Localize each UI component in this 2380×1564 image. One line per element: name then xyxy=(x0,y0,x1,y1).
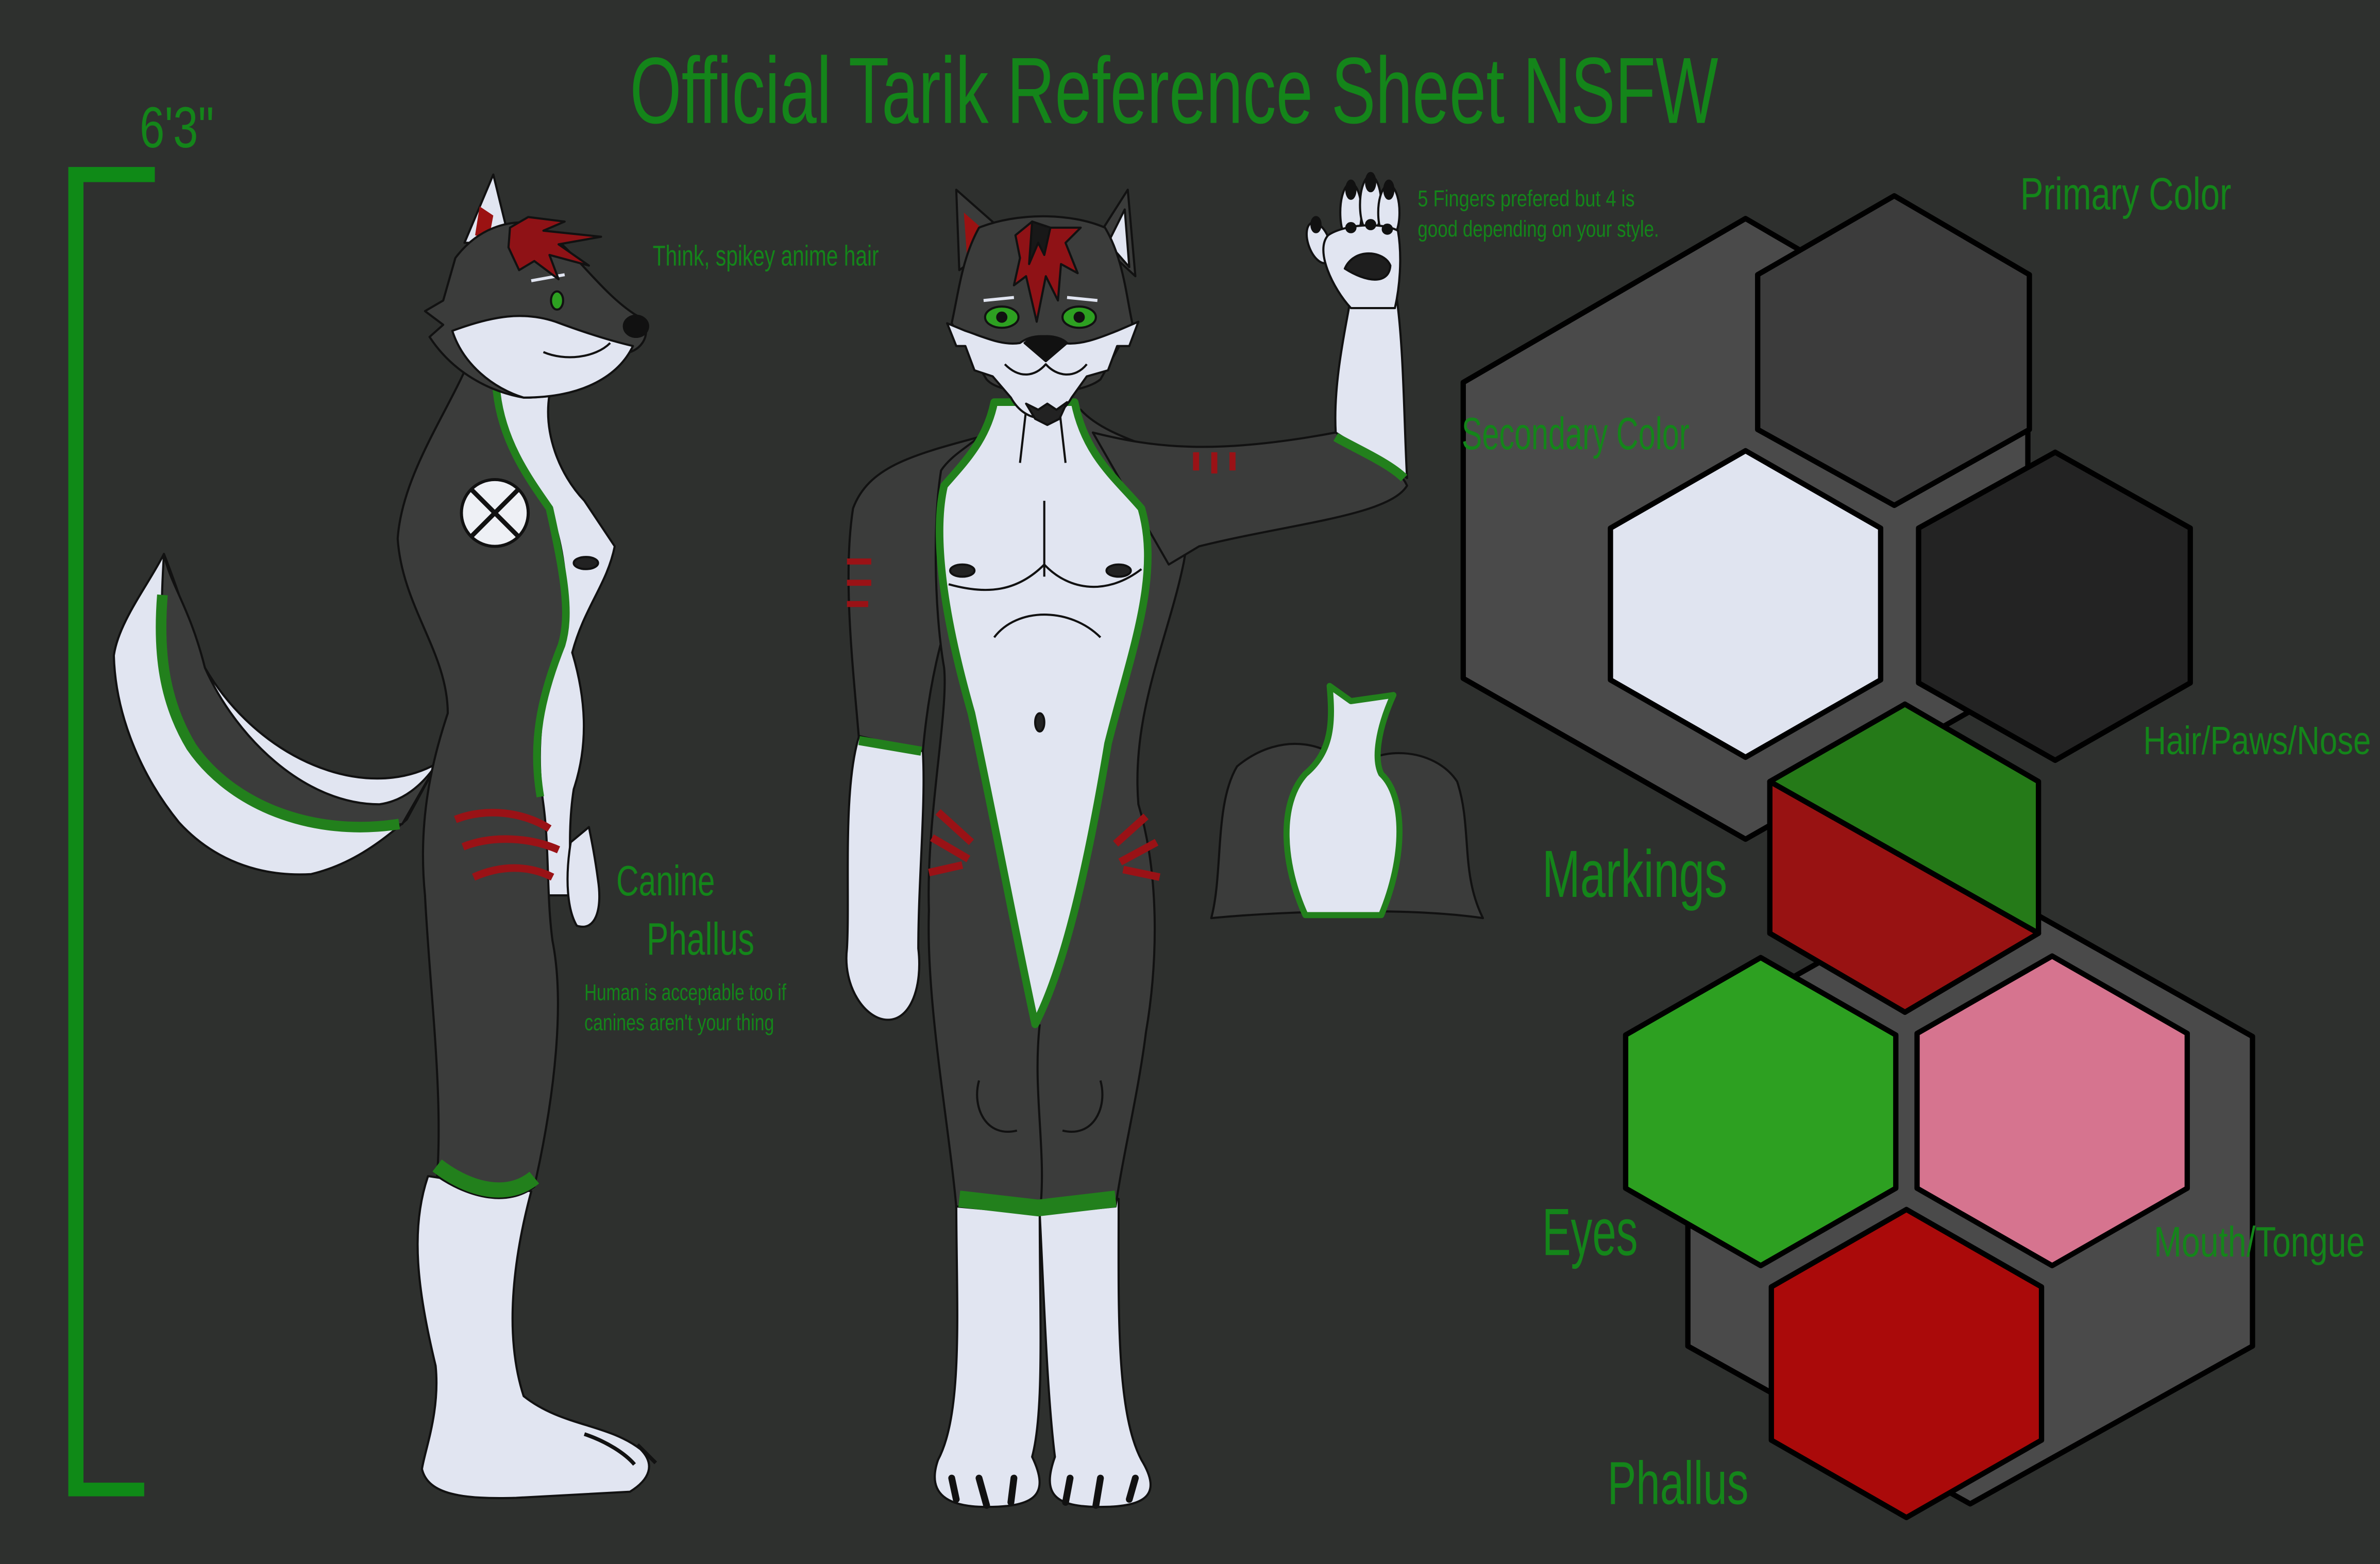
leg marking band xyxy=(437,1165,534,1190)
chest details xyxy=(950,565,1131,732)
side toes xyxy=(584,1434,656,1465)
backing hexagon lower xyxy=(1688,877,2253,1504)
label: secondary color: Secondary Color xyxy=(1462,408,1690,459)
note: fingers: 5 Fingers prefered but 4 is xyxy=(1417,186,1635,212)
chest and hip front xyxy=(498,387,615,895)
side hair xyxy=(509,217,601,279)
leg marking bands xyxy=(959,1199,1116,1208)
swatch: phallus xyxy=(1771,1210,2041,1518)
chest stripe xyxy=(496,388,566,797)
height bracket xyxy=(69,167,155,1497)
title: Official Tarik Reference Sheet NSFW xyxy=(630,38,1718,143)
colour palette xyxy=(1463,196,2253,1518)
tail xyxy=(114,554,437,874)
chest lines xyxy=(949,410,1141,637)
side head xyxy=(425,175,648,398)
label: canine phallus: Phallus xyxy=(647,913,754,964)
label: primary color: Primary Color xyxy=(2020,168,2231,219)
raised arm xyxy=(1093,296,1407,565)
note: alternative: canines aren't your thing xyxy=(584,1010,774,1035)
torso and thighs xyxy=(929,410,1199,1214)
swatch: secondary xyxy=(1610,451,1881,757)
belly patch xyxy=(939,402,1148,1024)
note: fingers: good depending on your style. xyxy=(1417,217,1659,242)
figure: rear view silhouette xyxy=(1211,686,1483,918)
shoulder emblem xyxy=(462,480,528,547)
label: phallus: Phallus xyxy=(1608,1449,1749,1517)
figure: side view xyxy=(114,175,656,1498)
side hand xyxy=(567,827,599,927)
note: fingers xyxy=(1417,186,1659,242)
label: markings: Markings xyxy=(1542,837,1727,911)
front head xyxy=(947,190,1138,425)
label: canine phallus: Canine xyxy=(616,857,715,905)
height label: 6'3" xyxy=(140,95,214,160)
hip markings xyxy=(455,812,559,877)
left arm xyxy=(849,437,979,751)
front hair xyxy=(1014,222,1081,322)
lower legs xyxy=(935,1199,1040,1507)
note: alternative xyxy=(584,980,786,1035)
swatch: markings xyxy=(1770,704,2038,1012)
nipple xyxy=(574,557,598,569)
claws xyxy=(952,1478,1135,1505)
leg lines xyxy=(977,1024,1102,1214)
body xyxy=(398,349,566,1198)
label: canine phallus xyxy=(616,857,754,964)
figure: front view xyxy=(847,173,1407,1507)
label: eyes: Eyes xyxy=(1542,1195,1638,1269)
backing hexagon upper xyxy=(1463,218,2028,839)
hip markings xyxy=(929,812,1160,877)
swatch: mouth tongue xyxy=(1917,956,2187,1266)
swatch: primary xyxy=(1758,196,2030,505)
icon: raised paw xyxy=(1302,173,1400,308)
note: hair: Think, spikey anime hair xyxy=(653,240,879,272)
lower leg and foot xyxy=(417,1176,649,1498)
note: alternative: Human is acceptable too if xyxy=(584,980,786,1005)
swatch: eyes xyxy=(1626,958,1896,1266)
swatch: hair paws nose xyxy=(1918,452,2190,760)
